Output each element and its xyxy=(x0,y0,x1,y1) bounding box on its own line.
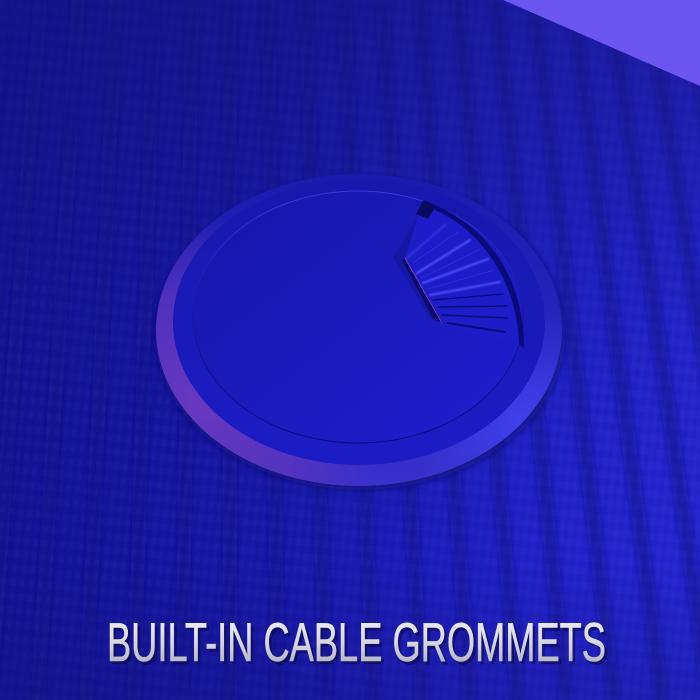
grommet shadow xyxy=(155,178,565,490)
background surface corner xyxy=(503,0,700,86)
cable opening xyxy=(393,200,524,348)
fan floor xyxy=(405,201,523,347)
dark arc slot xyxy=(423,200,524,348)
flat ring xyxy=(173,179,545,465)
cover disc edge xyxy=(192,190,524,444)
fan ribs xyxy=(407,225,500,295)
cover disc xyxy=(194,192,522,442)
opening edge highlight xyxy=(405,258,442,323)
dark top corner xyxy=(416,201,436,219)
outer rim xyxy=(156,174,562,486)
cable grommet xyxy=(155,174,565,490)
bevel face xyxy=(393,204,440,320)
shadow beside opening xyxy=(402,258,443,323)
